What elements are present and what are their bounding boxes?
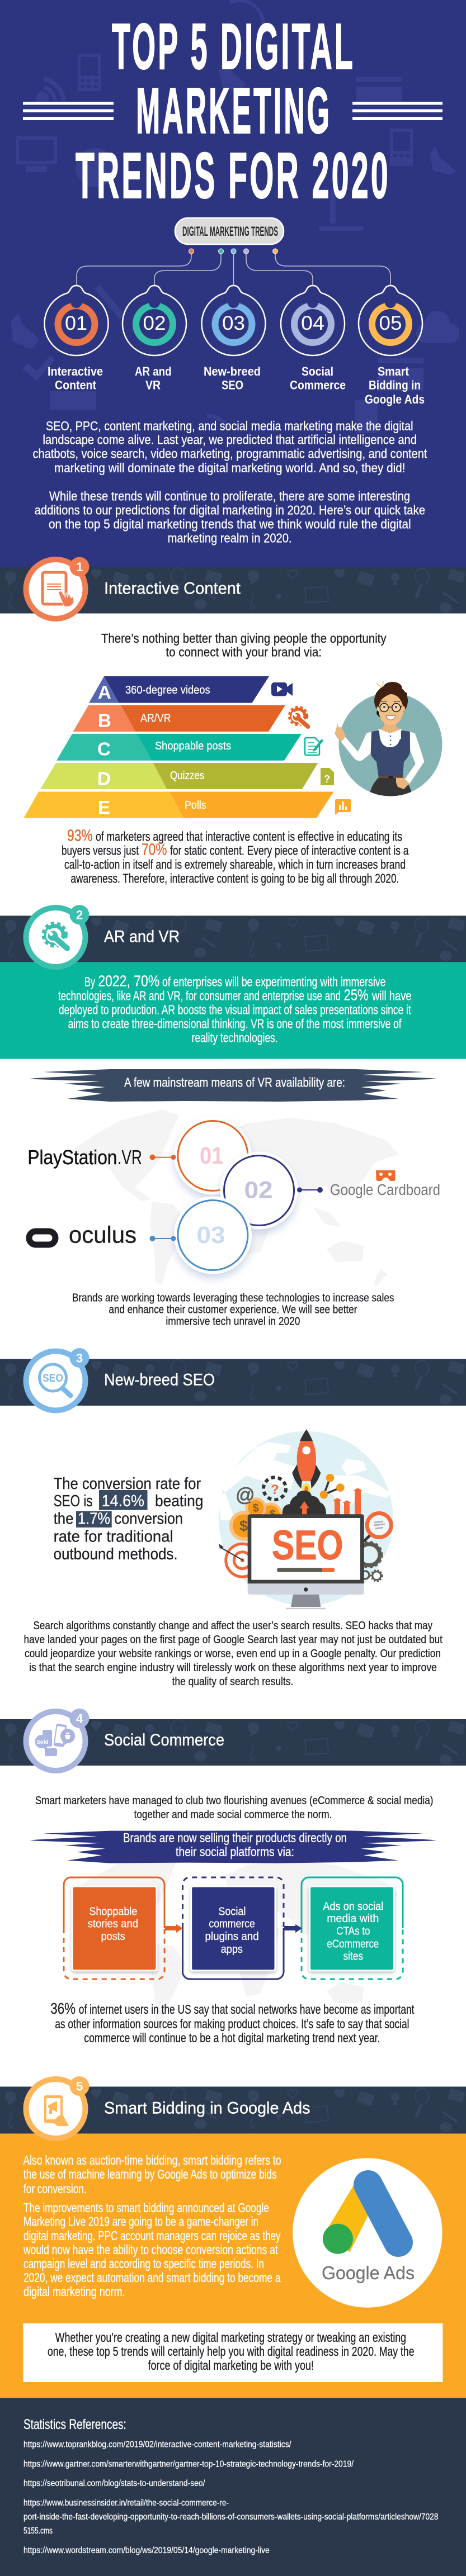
badge labels: Interactive [48, 364, 103, 378]
reference links: https://www.businessinsider.in/retail/the-social-commerce-re- [23, 2498, 229, 2508]
banner: VR availability: A few mainstream means of VR availability are: [124, 1075, 345, 1090]
stat callout: SEO conversion: beating [155, 1492, 203, 1510]
box: shoppable stories: stories and [88, 1918, 138, 1930]
section badge 4 [26, 1709, 90, 1771]
row C: Shoppable posts: Shoppable posts [155, 739, 231, 752]
stat callout: SEO conversion: The conversion rate for [54, 1475, 201, 1493]
row B: AR/VR: B [98, 710, 111, 730]
box: social commerce plugins: commerce [209, 1918, 255, 1930]
text: smart bidding: digital marketing norm. [23, 2284, 125, 2299]
stat callout: SEO conversion: SEO is [54, 1492, 93, 1510]
text: smart bidding: 2020, we expect automation and smart bidding to become a [23, 2270, 281, 2285]
paragraph: brands leveraging: immersive tech unravel in 2020 [166, 1315, 300, 1328]
badge labels: AR and [135, 364, 171, 378]
stat callout: SEO conversion: 14.6% [102, 1492, 144, 1510]
panel: smart bidding orange [0, 2133, 466, 2398]
badge 03: 03 [222, 312, 245, 334]
stat callout: SEO conversion [54, 1475, 203, 1563]
globe land patches [218, 1442, 392, 1520]
text: smart bidding: campaign level and according to specific time periods. In [23, 2256, 264, 2271]
section badge 3 [26, 1348, 90, 1411]
stat paragraph: interactive content: buyers versus just [62, 843, 139, 857]
world map background 2 [70, 1851, 398, 2028]
references heading: Statistics References: [23, 2417, 126, 2432]
box: ads on social media: media with [327, 1912, 379, 1925]
shirt and collar [378, 729, 402, 748]
icon: gear wrench [289, 707, 308, 727]
at sign and question [236, 1477, 286, 1506]
section badge 3: 3 [76, 1351, 83, 1365]
banner: VR availability [30, 1069, 437, 1102]
at sign and question: @ [236, 1484, 255, 1506]
skirt [370, 778, 412, 796]
box: social commerce plugins [182, 1877, 284, 1979]
text: smart bidding: The improvements to smart bidding announced at Google [23, 2200, 269, 2215]
paragraph: smart marketers [35, 1794, 433, 1821]
rocket [283, 1429, 326, 1515]
stat paragraph: social commerce [50, 2000, 415, 2045]
box: ads on social media: Ads on social [323, 1900, 383, 1913]
section badge 4: 4 [76, 1711, 83, 1725]
row C: Shoppable posts [57, 734, 302, 761]
row A: 360-degree videos: 360-degree videos [125, 684, 210, 696]
panel: AR and VR text: By [84, 974, 95, 989]
section badge 1 [26, 557, 90, 619]
reference links: https://www.gartner.com/smarterwithgartner/gartner-top-10-strategic-technology-trends-for-2019/ [23, 2460, 354, 2469]
banner: brands selling: their social platforms via: [176, 1844, 294, 1859]
box: social commerce plugins: plugins and [205, 1930, 259, 1943]
circle 03: 03 [197, 1222, 225, 1249]
pill: digital marketing trends: DIGITAL MARKETING TRENDS [182, 224, 278, 239]
row E: Polls: Polls [185, 799, 206, 812]
coins: $ [253, 1502, 259, 1515]
hands [335, 724, 346, 741]
stat callout: SEO conversion: outbound methods. [54, 1545, 178, 1563]
box: ads on social media: eCommerce [327, 1937, 379, 1950]
connector 01 [150, 1155, 176, 1160]
badge 02 [123, 286, 186, 355]
illustration: presenter woman [335, 681, 442, 799]
panel: AR and VR text: of enterprises will be experimenting with immersive [162, 974, 386, 989]
reference links: 5155.cms [23, 2526, 53, 2536]
section badge 5: 5 [76, 2079, 83, 2093]
icon: poll bubble [335, 799, 351, 815]
logo: Google Cardboard: Google Cardboard [330, 1181, 440, 1198]
badge labels: Smart [378, 364, 409, 378]
panel: AR and VR text: reality technologies. [192, 1030, 278, 1045]
paragraph: search algorithms: the quality of search results. [172, 1675, 293, 1688]
banner: brands selling: Brands are now selling their products directly on [123, 1830, 347, 1845]
badge labels: Social [302, 364, 333, 378]
intro text: landscape come alive. Last year, we predicted that artificial intelligence and [43, 433, 417, 447]
reference links: https://www.wordstream.com/blog/ws/2019/05/14/google-marketing-live [23, 2546, 270, 2555]
text: smart bidding: for conversion. [23, 2181, 87, 2196]
title side stripes [23, 102, 443, 120]
panel: AR and VR text: will have [371, 988, 412, 1003]
panel: AR and VR text: technologies, like AR and VR, for consumer and enterprise use and [58, 988, 341, 1003]
badge labels: Content [55, 378, 97, 392]
box: shoppable stories: posts [101, 1930, 125, 1943]
coins [229, 1497, 283, 1541]
intro text: SEO, PPC, content marketing, and social media marketing make the digital [46, 419, 413, 433]
connectors from pill to badges [77, 249, 390, 285]
row E: Polls: E [98, 797, 110, 818]
row E: Polls [23, 791, 333, 818]
gears and magnifier [356, 1514, 391, 1581]
logo: Google Cardboard [330, 1170, 440, 1198]
badge 03 [201, 286, 265, 355]
paragraph: brands leveraging: and enhance their customer experience. We will see better [109, 1303, 357, 1316]
heading: Smart Bidding in Google Ads [104, 2099, 310, 2117]
badge labels: Bidding in [369, 378, 421, 392]
heading: New-breed SEO [104, 1371, 215, 1389]
heading: Interactive Content [104, 579, 241, 598]
badge 01 [45, 286, 109, 355]
box: ads on social media [302, 1877, 403, 1979]
stat callout: SEO conversion: the [54, 1510, 74, 1528]
pyramid chart [23, 676, 333, 818]
row A: 360-degree videos [89, 676, 269, 703]
section badge 2 [26, 905, 90, 967]
monitor [248, 1514, 364, 1609]
circle 01 [174, 1117, 252, 1195]
left sleeve [341, 732, 371, 761]
section badge 2: 2 [76, 908, 83, 922]
row D: Quizzes: D [97, 768, 111, 789]
logo: oculus: oculus [69, 1222, 136, 1248]
intro text [32, 419, 427, 545]
intro line: interactive content: There’s nothing better than giving people the opportunity [101, 631, 387, 646]
pill: digital marketing trends [175, 218, 284, 244]
reference links: https://www.toprankblog.com/2019/02/interactive-content-marketing-statistics/ [23, 2440, 291, 2450]
connector 03 [150, 1236, 176, 1241]
row B: AR/VR [73, 705, 285, 732]
badge labels [48, 364, 425, 406]
target [219, 1544, 259, 1577]
world map background [70, 1109, 398, 1287]
belt [378, 777, 403, 778]
paragraph: brands leveraging [72, 1292, 394, 1328]
paragraph: smart marketers: together and made social commerce the norm. [134, 1808, 332, 1821]
intro text: While these trends will continue to proliferate, there are some interesting [49, 488, 410, 503]
icon: quiz document: ? [324, 774, 330, 785]
logo: Google Ads [293, 2158, 442, 2308]
heading: AR and VR [104, 928, 180, 946]
title [76, 10, 390, 212]
panel: AR and VR text: 25% [344, 986, 369, 1003]
panel: header background [0, 0, 466, 567]
stat paragraph: interactive content: 93% [67, 827, 93, 845]
section badge 4: Sold [36, 1739, 49, 1745]
stat paragraph: interactive content [62, 827, 409, 885]
logo: oculus [29, 1222, 136, 1248]
connector 02 [297, 1187, 323, 1193]
text: smart bidding: Marketing Live 2019 are going to be a game-changer in [23, 2214, 258, 2229]
molecule [320, 1474, 345, 1499]
box: social commerce plugins: Social [218, 1905, 246, 1918]
stat callout: SEO conversion: conversion [114, 1510, 183, 1528]
text: smart bidding: the use of machine learning by Google Ads to optimize bids [23, 2167, 277, 2181]
section band 5: Smart Bidding [0, 2076, 466, 2138]
section band 4: Social Commerce [0, 1709, 466, 1771]
box: ads on social media: CTAs to [336, 1925, 370, 1937]
box: social commerce plugins: apps [221, 1943, 243, 1956]
box: ads on social media: sites [343, 1949, 363, 1962]
monitor: SEO [272, 1522, 343, 1568]
panel: references [0, 2398, 466, 2576]
box: shoppable stories: Shoppable [89, 1905, 137, 1918]
section band 2: AR and VR [0, 905, 466, 967]
circle 01: 01 [200, 1142, 224, 1169]
circle 02 [220, 1151, 298, 1230]
badge 01: 01 [65, 312, 87, 334]
badge labels: SEO [222, 378, 243, 392]
section band 3: New-breed SEO [0, 1348, 466, 1411]
illustration: SEO rocket and monitor [218, 1429, 393, 1609]
callout: closing message [23, 2323, 443, 2382]
coins: $ [270, 1508, 276, 1521]
icon: quiz document [321, 768, 334, 785]
circle 03 [174, 1196, 252, 1274]
intro line: interactive content: to connect with your brand via: [166, 645, 322, 660]
paragraph: brands leveraging: Brands are working towards leveraging these technologies to increase sales [72, 1292, 394, 1304]
banner: brands selling [30, 1830, 437, 1863]
growth bars [333, 1488, 363, 1515]
section badge 5 [26, 2076, 90, 2138]
logo: PlayStation VR: .VR [117, 1146, 142, 1169]
stat callout: SEO conversion: rate for traditional [54, 1527, 173, 1545]
text: smart bidding [23, 2153, 281, 2299]
text: smart bidding: Also known as auction-time bidding, smart bidding refers to [23, 2153, 281, 2167]
panel: AR and VR text [0, 962, 466, 1059]
head [376, 681, 383, 688]
badge labels: New-breed [204, 364, 261, 378]
stat paragraph: interactive content: 70% [142, 841, 167, 858]
intro text: on the top 5 digital marketing trends that we think would rule the digital [49, 516, 411, 531]
icon: document pencil [305, 738, 323, 755]
logo: PlayStation VR: PlayStation [27, 1146, 117, 1169]
badge 04 [281, 286, 345, 355]
badge 04: 04 [301, 312, 324, 334]
circle 02: 02 [244, 1176, 273, 1203]
box: shoppable stories [64, 1877, 164, 1979]
badge 05: 05 [379, 312, 402, 334]
panel: AR and VR text: 2022, 70% [98, 972, 159, 989]
logo: Google Ads: Google Ads [322, 2262, 415, 2283]
neck [380, 718, 401, 733]
stat callout: SEO conversion: 1.7% [78, 1510, 110, 1528]
intro text: marketing realm in 2020. [168, 531, 292, 545]
row B: AR/VR: AR/VR [140, 712, 171, 724]
badge 02: 02 [143, 312, 166, 334]
intro text: additions to our predictions for digital marketing in 2020. Here’s our quick take [35, 503, 425, 518]
text: smart bidding: digital marketing. PPC account managers can rejoice as they [23, 2228, 281, 2243]
paragraph: search algorithms [23, 1619, 443, 1688]
arrow: box 2 to box 3 [284, 1924, 302, 1933]
badge labels: VR [145, 378, 161, 392]
intro text: marketing will dominate the digital marketing world. And so, they did! [54, 461, 405, 475]
stat paragraph: social commerce: commerce will continue to be a hot digital marketing trend next year. [84, 2031, 380, 2045]
badge 05 [359, 286, 422, 355]
text: smart bidding: would now have the ability to choose conversion actions at [23, 2242, 278, 2257]
coins: $ [239, 1517, 248, 1534]
row D: Quizzes: Quizzes [170, 769, 205, 782]
callout: closing message: force of digital marketing be with you! [148, 2358, 314, 2373]
badge labels: Commerce [290, 378, 346, 392]
heading: Social Commerce [104, 1731, 224, 1749]
row D: Quizzes [40, 763, 318, 789]
arrow: box 1 to box 2 [165, 1924, 183, 1933]
vest [371, 730, 410, 777]
section badge 3: SEO [43, 1373, 63, 1384]
stat paragraph: social commerce: 36% [50, 2000, 76, 2017]
at sign and question: ? [271, 1482, 279, 1497]
row A: 360-degree videos: A [98, 682, 111, 703]
intro line: interactive content [101, 631, 387, 660]
right sleeve [404, 732, 424, 784]
reference links: https://seotribunal.com/blog/stats-to-understand-seo/ [23, 2479, 205, 2488]
section badge 1: 1 [76, 560, 83, 574]
row C: Shoppable posts: C [97, 739, 111, 760]
section band 1: Interactive Content [0, 557, 466, 619]
reference links [23, 2440, 439, 2555]
icon: video [271, 682, 293, 696]
badge labels: Google Ads [365, 392, 425, 406]
